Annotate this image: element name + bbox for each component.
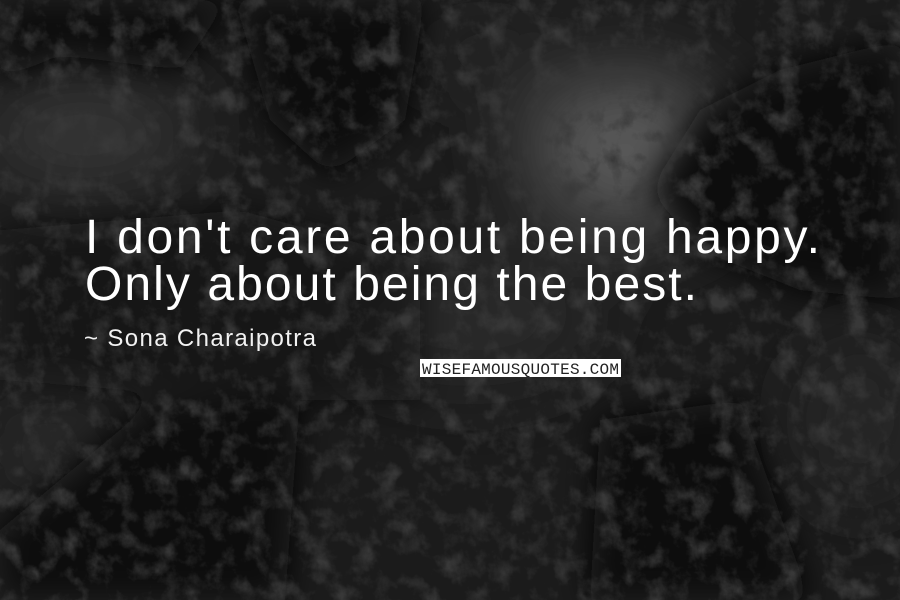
website logo badge: WISEFAMOUSQUOTES.COM xyxy=(422,361,619,379)
quote text xyxy=(85,211,820,311)
trunk: upper centre xyxy=(235,0,425,175)
trunk: lower left xyxy=(0,395,300,600)
trunk: lower right xyxy=(590,400,810,600)
foliage: upper right xyxy=(650,40,900,300)
quote line 1: I don't care about being happy. xyxy=(85,211,820,264)
author attribution: ~ Sona Charaipotra xyxy=(84,325,317,352)
foliage: upper left xyxy=(0,0,230,80)
dark band behind text xyxy=(0,210,420,400)
quote line 2: Only about being the best. xyxy=(85,258,697,311)
